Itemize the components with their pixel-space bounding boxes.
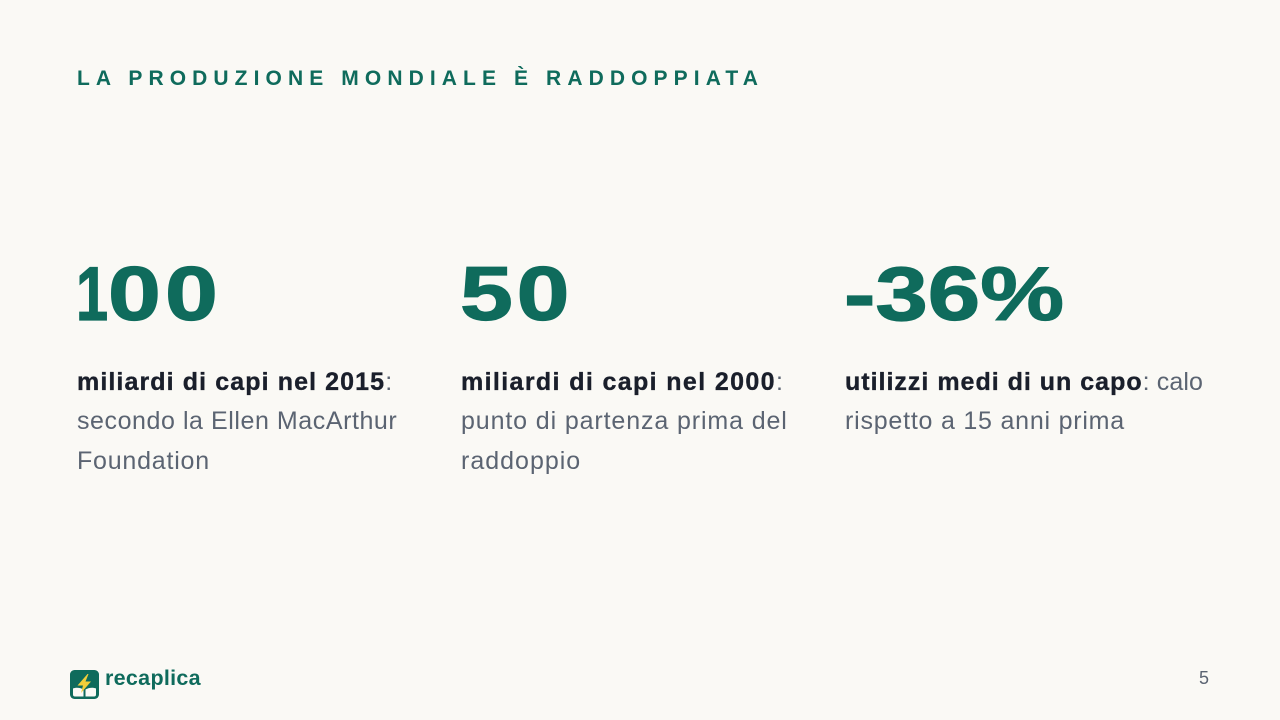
stat: -36%: -36%: [844, 252, 1064, 337]
page number: 5: [1199, 668, 1209, 688]
brand name: recaplica: [105, 666, 201, 690]
text: stat -36% description: utilizzi medi di un capo: calo: [845, 368, 1203, 396]
text: stat -36% description: rispetto a 15 anni prima: [845, 407, 1125, 435]
icon: recaplica logo: [70, 670, 99, 699]
text: stat 100 description: Foundation: [77, 446, 210, 474]
text: stat -36% description: [845, 368, 1203, 435]
stat: 100: [76, 252, 218, 337]
stat: 100: 0: [165, 252, 218, 337]
stat: 100: 0: [108, 252, 161, 337]
text: stat 100 description: [77, 368, 397, 474]
text: stat 50 description: [461, 368, 788, 474]
stat: 50: 50: [460, 252, 573, 337]
text: stat 50 description: miliardi di capi nel 2000:: [461, 368, 783, 396]
text: stat 100 description: miliardi di capi nel 2015:: [77, 368, 392, 396]
text: stat 50 description: raddoppio: [461, 446, 581, 474]
stat: 100: 1: [76, 252, 108, 337]
text: stat 50 description: punto di partenza prima del: [461, 407, 788, 435]
text: stat 100 description: secondo la Ellen MacArthur: [77, 407, 397, 435]
title: LA PRODUZIONE MONDIALE È RADDOPPIATA: [77, 67, 764, 90]
